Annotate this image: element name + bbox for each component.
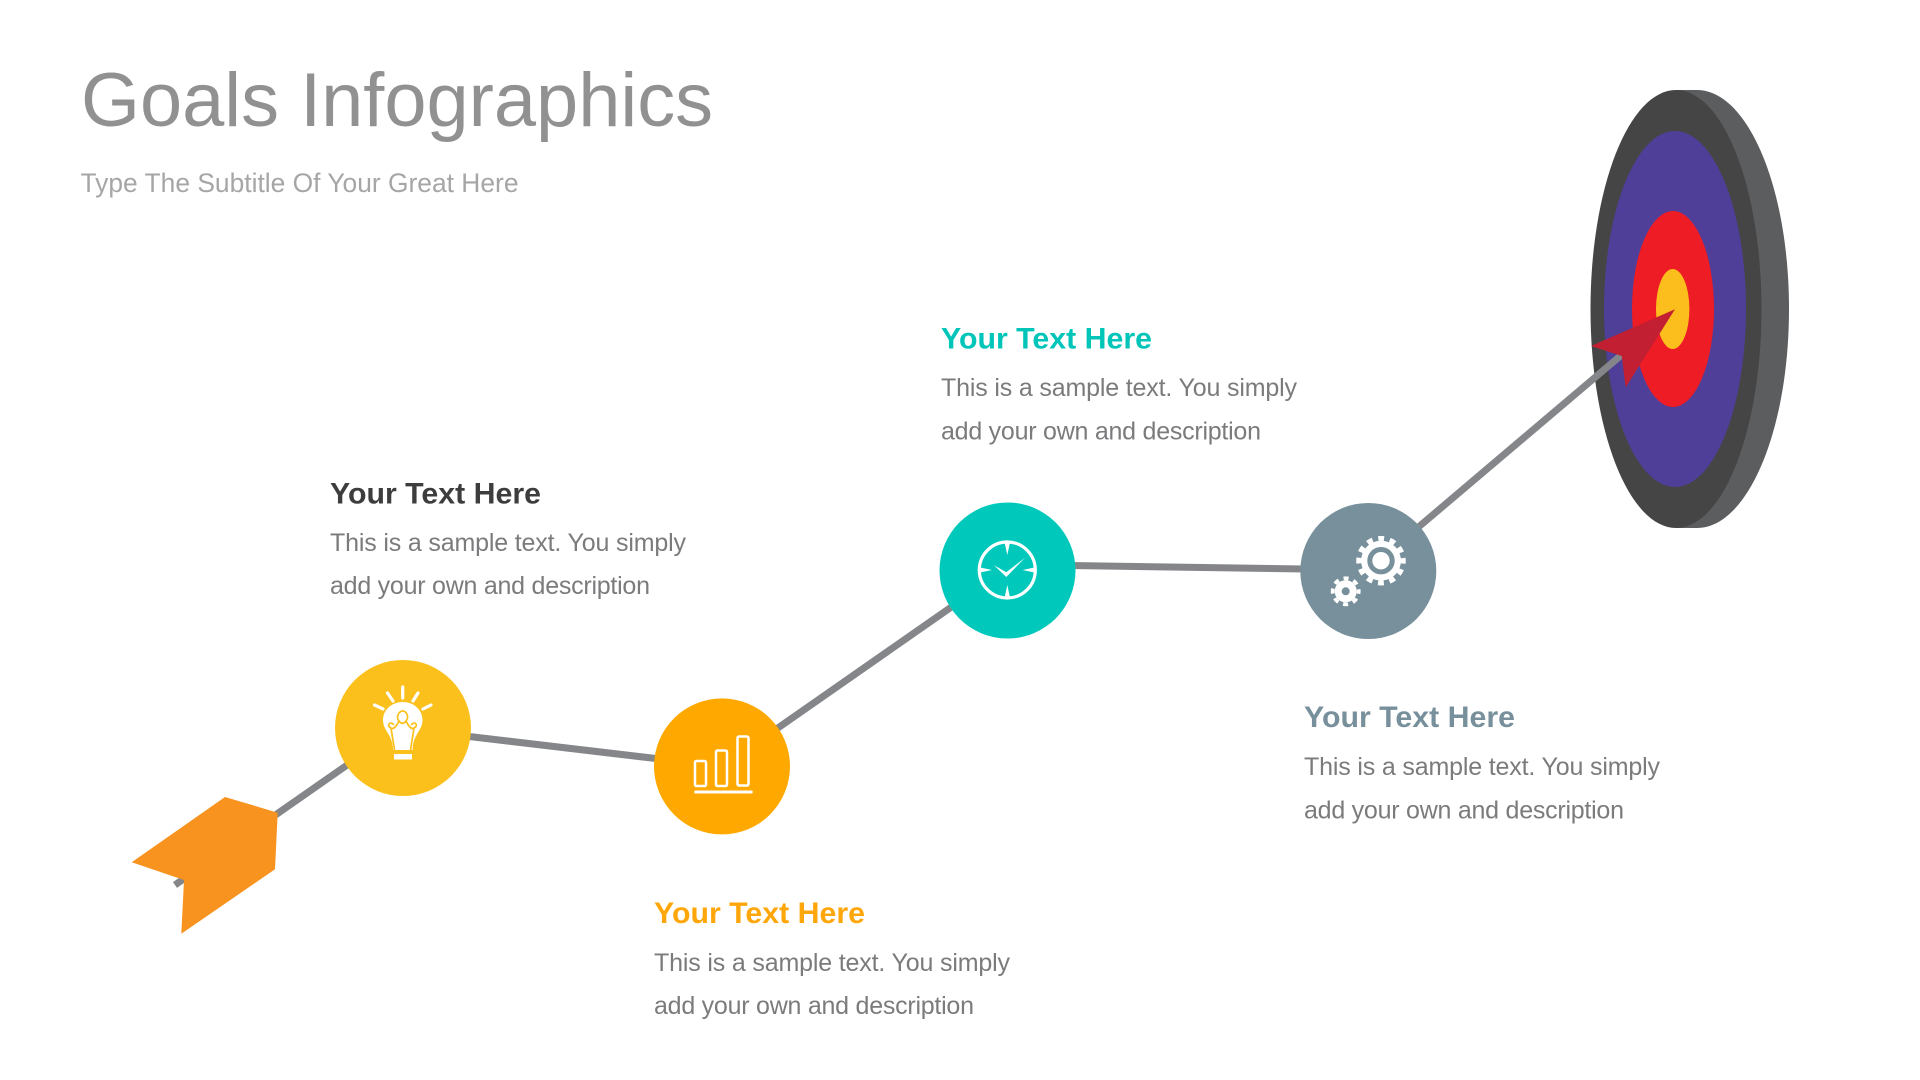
icon: lightbulb [374, 687, 431, 760]
arrow shaft [1415, 352, 1625, 530]
target red ring [1632, 211, 1714, 407]
connector path [175, 566, 1305, 885]
icon: clock [979, 542, 1036, 598]
text block 2 [654, 897, 1010, 1020]
text block 4 [1304, 701, 1660, 824]
target board [1590, 90, 1789, 528]
text block 2: Your Text Here [654, 897, 865, 930]
arrow head [1591, 309, 1675, 387]
arrow fletching [132, 797, 278, 934]
text block 3 [941, 322, 1298, 445]
subtitle: Type The Subtitle Of Your Great Here [80, 168, 518, 198]
target bullseye [1656, 269, 1689, 349]
text block 3: add your own and description [941, 417, 1261, 445]
text block 1: add your own and description [330, 572, 650, 600]
step 4: gears circle [1300, 503, 1436, 639]
icon: gears [1333, 539, 1403, 604]
text block 1: Your Text Here [330, 478, 541, 510]
step 2: bar chart circle [654, 698, 790, 834]
text block 3: This is a sample text. You simply [941, 374, 1298, 402]
text block 3: Your Text Here [941, 322, 1152, 356]
step 1: lightbulb circle [335, 660, 471, 796]
text block 4: Your Text Here [1304, 701, 1515, 734]
step 3: clock circle [940, 502, 1076, 638]
text block 1 [330, 478, 686, 600]
text block 1: This is a sample text. You simply [330, 529, 686, 557]
title: Goals Infographics [81, 58, 713, 143]
target outer ring [1590, 90, 1762, 528]
target purple ring [1604, 131, 1746, 487]
icon: bar chart [695, 736, 751, 792]
text block 4: add your own and description [1304, 796, 1624, 824]
text block 2: add your own and description [654, 992, 974, 1020]
text block 2: This is a sample text. You simply [654, 949, 1010, 977]
target side [1676, 90, 1789, 528]
text block 4: This is a sample text. You simply [1304, 753, 1660, 781]
